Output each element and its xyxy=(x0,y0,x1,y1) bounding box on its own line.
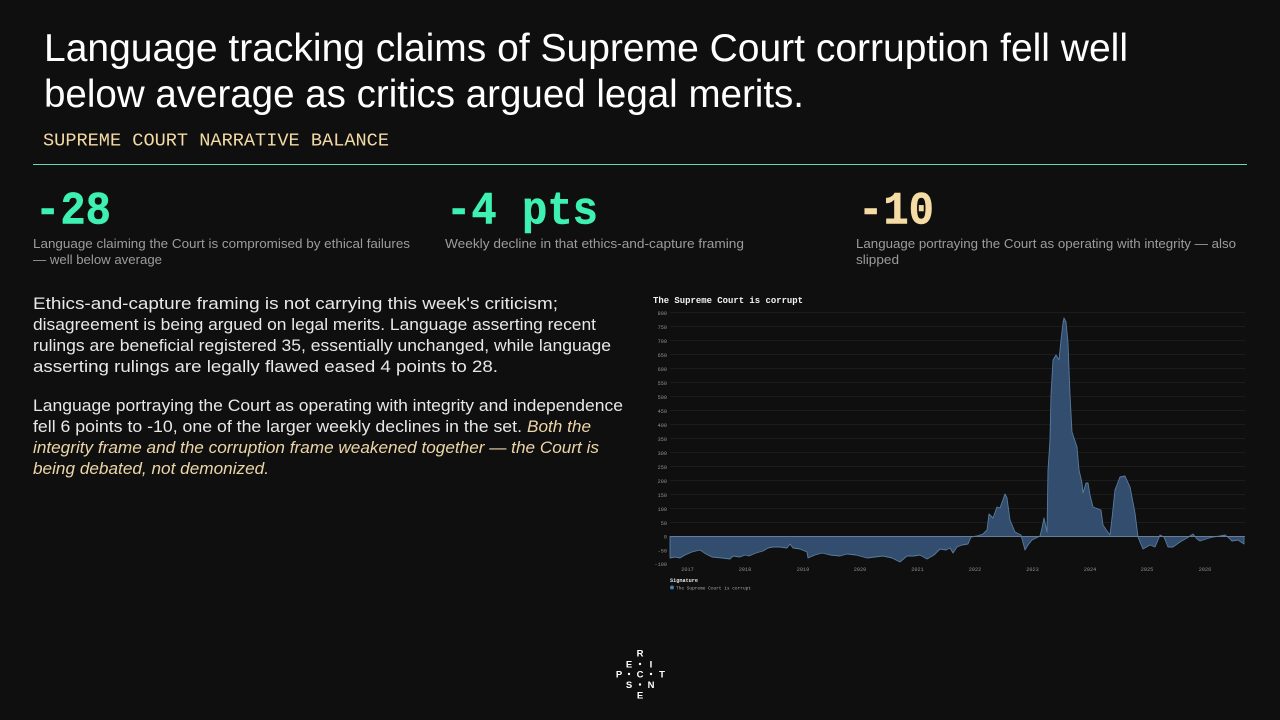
y axis labels: 450 xyxy=(658,409,667,415)
logo xyxy=(616,648,665,702)
y axis labels: 100 xyxy=(658,507,667,513)
x axis labels: 2025 xyxy=(1141,567,1153,573)
logo: I xyxy=(650,660,652,670)
logo: R xyxy=(637,648,644,660)
logo: N xyxy=(648,680,655,691)
x axis labels: 2024 xyxy=(1084,567,1096,573)
x axis labels: 2020 xyxy=(854,567,866,573)
y axis labels: 750 xyxy=(658,325,667,331)
text block: paragraph two: being debated, not demonized. xyxy=(33,459,269,478)
text block: paragraph two xyxy=(33,396,623,478)
y axis labels: 0 xyxy=(664,534,667,540)
y axis labels: 250 xyxy=(658,465,667,471)
stat: -4 pts xyxy=(445,186,744,251)
y axis labels: 350 xyxy=(658,437,667,443)
x axis labels: 2026 xyxy=(1199,567,1211,573)
logo: E xyxy=(626,660,632,670)
stat: -28: — well below average xyxy=(33,253,162,267)
legend: Signature xyxy=(670,578,698,584)
stat: -10: -10 xyxy=(858,186,934,238)
logo: E xyxy=(637,690,643,702)
y axis labels: 400 xyxy=(658,423,667,429)
logo: S xyxy=(626,680,632,691)
chart title: The Supreme Court is corrupt xyxy=(653,296,803,306)
stat: -4 pts: Weekly decline in that ethics-and-capture framing xyxy=(445,237,744,251)
chart: The Supreme Court is corrupt xyxy=(653,296,1245,592)
y axis labels: -50 xyxy=(658,548,667,554)
y axis labels: 200 xyxy=(658,479,667,485)
y axis labels: 550 xyxy=(658,381,667,387)
x axis labels: 2022 xyxy=(969,567,981,573)
y axis labels: 600 xyxy=(658,367,667,373)
text block: paragraph one: rulings are beneficial registered 35, essentially unchanged, while language xyxy=(33,336,611,355)
text block: paragraph one xyxy=(33,294,611,376)
stat: -10: Language portraying the Court as operating with integrity — also xyxy=(856,237,1236,251)
subtitle: SUPREME COURT NARRATIVE BALANCE xyxy=(43,130,389,152)
y axis labels: -100 xyxy=(655,562,667,568)
x axis labels: 2019 xyxy=(797,567,809,573)
text block: paragraph one: disagreement is being argued on legal merits. Language asserting recent xyxy=(33,315,596,334)
stat: -4 pts: -4 pts xyxy=(446,186,598,238)
y axis labels: 300 xyxy=(658,451,667,457)
x axis labels xyxy=(681,567,1211,573)
title xyxy=(44,27,1128,116)
text block: paragraph two: Both the xyxy=(527,417,591,436)
y axis labels: 700 xyxy=(658,339,667,345)
x axis labels: 2021 xyxy=(911,567,924,573)
area series xyxy=(670,318,1244,562)
y axis labels: 150 xyxy=(658,493,667,499)
text block: paragraph two: integrity frame and the corruption frame weakened together — the Court is xyxy=(33,438,599,457)
legend: The Supreme Court is corrupt xyxy=(676,586,751,592)
title: Language tracking claims of Supreme Court corruption fell well xyxy=(44,27,1128,70)
stat: -28 xyxy=(33,186,410,267)
logo: C xyxy=(637,670,644,680)
x axis labels: 2017 xyxy=(681,567,694,573)
logo: P xyxy=(616,670,623,680)
legend xyxy=(670,578,751,592)
stat: -28: -28 xyxy=(35,186,111,238)
stat: -10: slipped xyxy=(856,253,899,267)
text block: paragraph two: Language portraying the Court as operating with integrity and independence xyxy=(33,396,623,415)
x axis labels: 2023 xyxy=(1026,567,1039,573)
y axis labels: 650 xyxy=(658,353,667,359)
y axis labels: 800 xyxy=(658,311,667,317)
y axis labels xyxy=(655,311,667,568)
logo: T xyxy=(659,670,665,680)
y axis labels: 50 xyxy=(661,521,667,527)
x axis labels: 2018 xyxy=(739,567,751,573)
stat: -10 xyxy=(856,186,1236,267)
stat: -28: Language claiming the Court is compromised by ethical failures xyxy=(33,237,410,251)
text block: paragraph one: Ethics-and-capture framing is not carrying this week's criticism; xyxy=(33,294,558,313)
title: below average as critics argued legal merits. xyxy=(44,73,804,116)
y axis labels: 500 xyxy=(658,395,667,401)
text block: paragraph one: asserting rulings are legally flawed eased 4 points to 28. xyxy=(33,357,498,376)
text block: paragraph two: fell 6 points to -10, one of the larger weekly declines in the set. xyxy=(33,417,522,436)
